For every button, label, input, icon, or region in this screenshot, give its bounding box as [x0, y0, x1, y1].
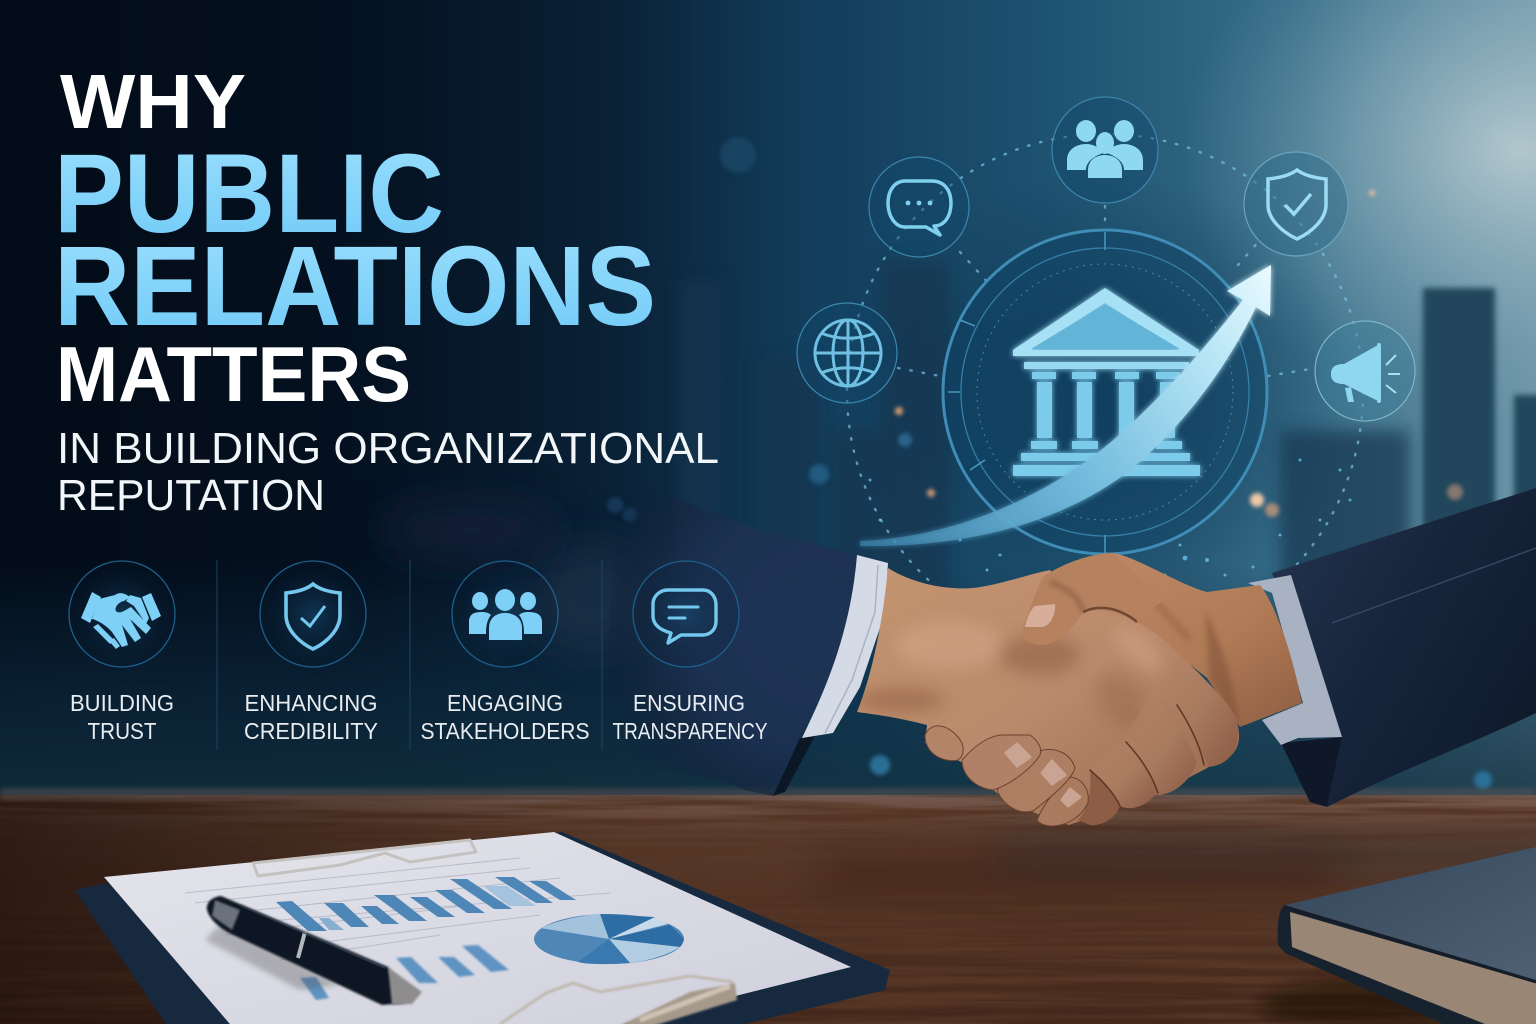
middle finger — [1123, 695, 1197, 795]
title — [54, 59, 719, 520]
finger tips — [925, 726, 1088, 826]
left hand — [855, 568, 1239, 826]
pillar: ensuring transparency — [612, 561, 768, 744]
icon: shield with check — [260, 561, 366, 667]
pillar: building trust — [69, 561, 175, 744]
notebook pages — [1290, 912, 1536, 1024]
icon: message bubble — [633, 561, 739, 667]
paper report — [104, 832, 851, 1024]
clipboard with report — [75, 832, 890, 1024]
notebook back cover and spine — [1278, 905, 1536, 1024]
bar chart — [276, 877, 576, 931]
heading: public: PUBLIC — [54, 131, 444, 256]
label second line: STAKEHOLDERS — [420, 718, 590, 744]
pillar: enhancing credibility — [244, 561, 378, 744]
index finger — [1150, 643, 1238, 767]
pie chart — [534, 914, 684, 964]
heading: matters: MATTERS — [56, 330, 411, 418]
subtitle second line: REPUTATION — [57, 471, 325, 520]
right hand palm and wrist — [1043, 553, 1302, 727]
dotted orbit connecting icons — [847, 134, 1363, 650]
label: ENGAGING — [447, 690, 563, 716]
ring finger — [1090, 740, 1158, 808]
background: blurred city skyline — [0, 0, 1536, 800]
label second line: TRUST — [88, 718, 156, 744]
icon: classical bank building — [1013, 288, 1200, 476]
lower bar chart — [300, 945, 509, 1000]
subtitle: IN BUILDING ORGANIZATIONAL — [57, 424, 719, 473]
icon: shield with check in circle — [1244, 152, 1348, 256]
right shirt cuff — [1248, 575, 1342, 745]
icon: handshake — [69, 561, 175, 667]
little finger base — [1078, 770, 1120, 825]
pen — [205, 896, 422, 1005]
pillar: engaging stakeholders — [420, 561, 590, 744]
icon: people group in circle — [1052, 97, 1158, 203]
icon: megaphone in circle — [1315, 321, 1415, 421]
bottom clip — [500, 976, 737, 1024]
label: ENSURING — [633, 690, 745, 716]
label: ENHANCING — [244, 690, 378, 716]
arrow: rising growth arrow — [860, 265, 1271, 546]
central ring with institution and growth arrow — [860, 230, 1271, 555]
closed notebook — [1260, 847, 1536, 1024]
label second line: TRANSPARENCY — [612, 718, 768, 744]
top clip — [253, 840, 476, 876]
heading: why: WHY — [60, 59, 246, 145]
left sleeve of jacket — [600, 470, 858, 796]
wooden table — [0, 788, 1536, 1024]
label second line: CREDIBILITY — [244, 718, 378, 744]
label: BUILDING — [70, 690, 174, 716]
clipboard board — [75, 832, 890, 1024]
notebook cover — [1285, 847, 1536, 980]
right sleeve of jacket — [1272, 488, 1536, 807]
right hand thumb — [1023, 553, 1165, 645]
icon: people — [452, 561, 558, 667]
icon: speech bubble in circle — [869, 157, 969, 257]
left shirt cuff — [802, 555, 888, 738]
heading: relations: RELATIONS — [54, 223, 656, 349]
icon: globe in circle — [797, 303, 897, 403]
